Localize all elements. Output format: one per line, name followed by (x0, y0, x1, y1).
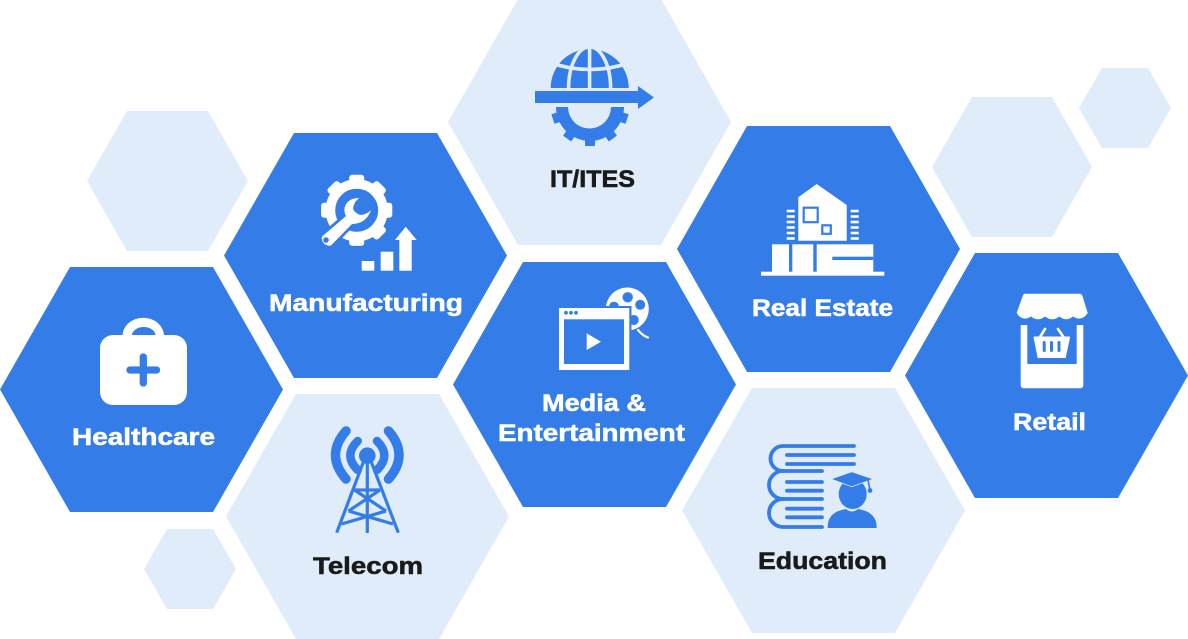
label: Education: Education (758, 548, 887, 575)
panel: Real Estate (677, 126, 960, 372)
icon: books and graduate (769, 446, 877, 528)
label: Real Estate: Real Estate (752, 295, 893, 322)
icon: shop with basket (1017, 294, 1088, 388)
label: Retail: Retail (1013, 409, 1086, 436)
decorative small hexagon: bottom left (144, 529, 236, 609)
icon: medical bag (100, 318, 187, 405)
icon: gear, wrench and growth bars (321, 175, 417, 271)
panel: Healthcare (0, 267, 283, 512)
panel: IT/ITES (448, 0, 731, 245)
panel: Education (682, 388, 965, 633)
icon: signal tower (336, 431, 399, 533)
label: Telecom: Telecom (313, 553, 423, 580)
label: Healthcare: Healthcare (72, 424, 215, 451)
decorative small hexagon: far right (1079, 68, 1171, 148)
icon: building (761, 184, 884, 276)
icon: globe, arrow and gear (535, 47, 654, 146)
label: Manufacturing: Manufacturing (269, 290, 463, 317)
label: IT/ITES: IT/ITES (550, 166, 635, 193)
decorative small hexagon: upper left (87, 111, 248, 251)
label: Media & Entertainment (498, 390, 685, 447)
label: Media & Entertainment: Entertainment (498, 420, 685, 447)
panel: Media & Entertainment (453, 262, 736, 507)
decorative small hexagon: upper right (932, 97, 1092, 237)
icon: video window and film reel (557, 288, 649, 372)
panel: Retail (905, 253, 1188, 498)
panel: Telecom (226, 394, 509, 639)
label: Media & Entertainment: Media & (542, 390, 646, 417)
panel: Manufacturing (224, 133, 507, 378)
